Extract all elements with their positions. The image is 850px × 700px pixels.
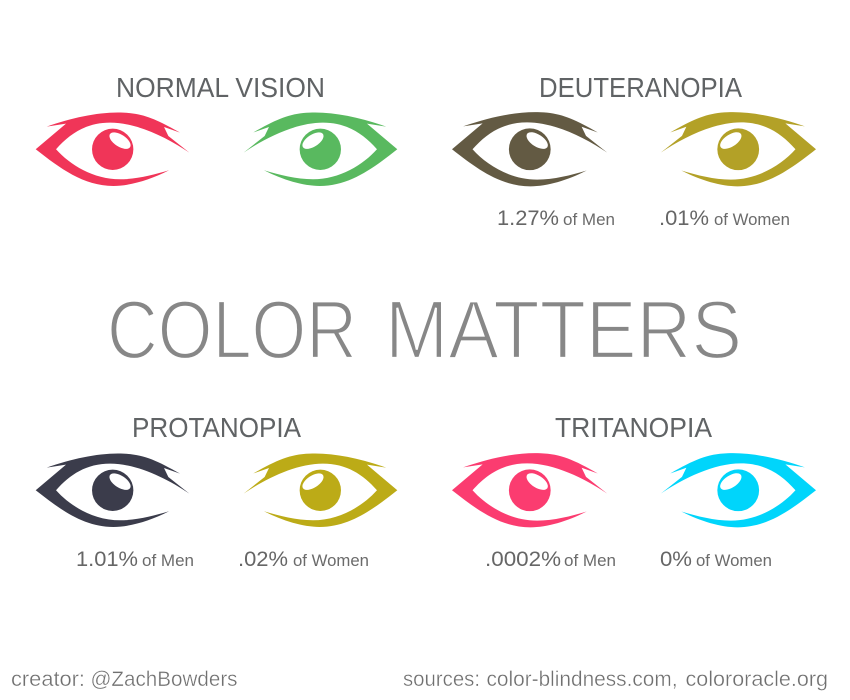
stat: deuteranopia women: .01% bbox=[659, 206, 709, 230]
credit: creator: @ZachBowders bbox=[90, 667, 238, 691]
icon: green eye bbox=[244, 113, 397, 186]
stat: protanopia men: of Men bbox=[142, 552, 194, 570]
icon: red eye bbox=[36, 113, 189, 186]
icon: cyan eye bbox=[661, 453, 816, 527]
title bbox=[107, 283, 742, 376]
stat: tritanopia men bbox=[485, 547, 616, 571]
credit: sources bbox=[403, 667, 828, 691]
stat: protanopia women: of Women bbox=[293, 552, 369, 570]
icon: dark slate eye bbox=[36, 454, 189, 527]
heading: deuteranopia: DEUTERANOPIA bbox=[539, 72, 743, 103]
heading: protanopia: PROTANOPIA bbox=[132, 412, 302, 443]
stat: tritanopia women bbox=[660, 547, 772, 571]
stat: tritanopia men: .0002% bbox=[485, 547, 561, 571]
stat: deuteranopia women bbox=[659, 206, 790, 230]
stat: deuteranopia women: of Women bbox=[714, 211, 790, 229]
stat: protanopia men: 1.01% bbox=[76, 547, 138, 571]
stat: deuteranopia men bbox=[497, 206, 615, 230]
title: MATTERS bbox=[385, 283, 742, 376]
heading: normal vision: NORMAL VISION bbox=[116, 72, 325, 103]
credit: sources: color-blindness.com, bbox=[486, 667, 678, 691]
title: COLOR bbox=[107, 283, 357, 376]
icon: mustard eye bbox=[244, 454, 397, 527]
icon: olive eye bbox=[661, 112, 816, 186]
stat: tritanopia men: of Men bbox=[564, 552, 616, 570]
stat: tritanopia women: 0% bbox=[660, 547, 692, 571]
credit: creator: creator: bbox=[11, 667, 85, 691]
stat: tritanopia women: of Women bbox=[696, 552, 772, 570]
stat: protanopia women bbox=[238, 547, 369, 571]
credit: sources: colororacle.org bbox=[686, 667, 828, 691]
stat: protanopia men bbox=[76, 547, 194, 571]
heading: tritanopia: TRITANOPIA bbox=[555, 412, 713, 443]
icon: pink eye bbox=[452, 453, 607, 527]
stat: protanopia women: .02% bbox=[238, 547, 288, 571]
icon: brown eye bbox=[452, 112, 607, 186]
stat: deuteranopia men: 1.27% bbox=[497, 206, 559, 230]
stat: deuteranopia men: of Men bbox=[563, 211, 615, 229]
credit: creator bbox=[11, 667, 238, 691]
credit: sources: sources: bbox=[403, 667, 480, 691]
